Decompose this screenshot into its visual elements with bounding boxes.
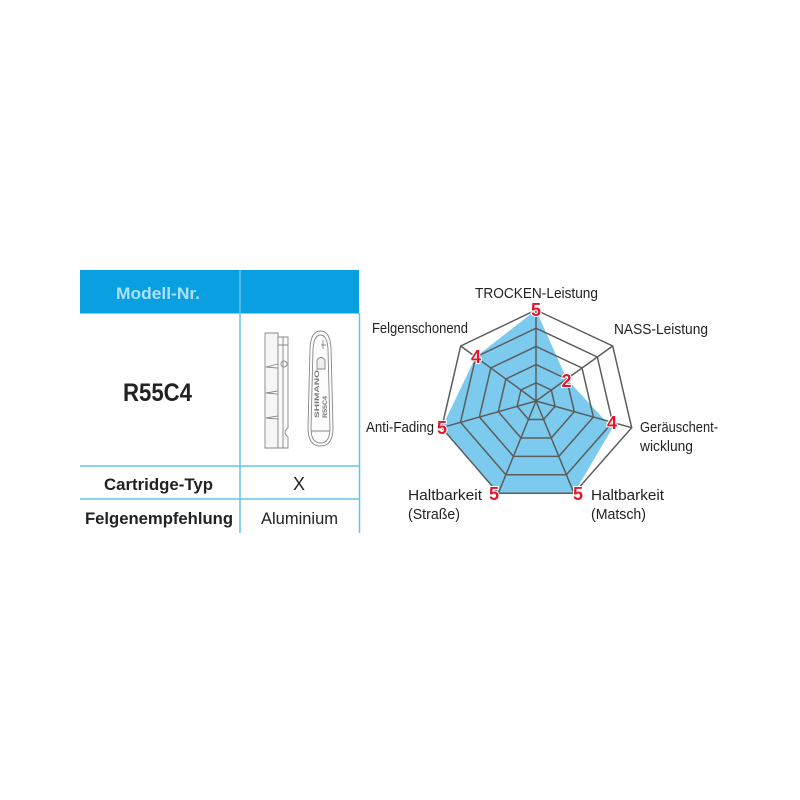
model name: R55C4 (123, 379, 192, 407)
icon text: brand and model (315, 369, 329, 418)
row label: cartridge type: Cartridge-Typ (104, 475, 213, 494)
axis labels: (Matsch) (591, 506, 646, 523)
table header bar (80, 270, 359, 314)
axis labels: Felgenschonend (372, 320, 468, 337)
axis labels (366, 285, 718, 523)
row label: rim recommendation: Felgenempfehlung (85, 509, 233, 528)
radar filled area (442, 310, 612, 493)
panel: model table (80, 270, 360, 533)
axis labels: Haltbarkeit (591, 487, 665, 504)
icon text: brand and model: SHIMANO (315, 369, 321, 418)
axis labels: NASS-Leistung (614, 321, 708, 338)
axis score values (437, 300, 617, 504)
axis score values: 5 (437, 418, 447, 438)
axis score values: 5 (531, 300, 541, 320)
axis score values: 4 (607, 413, 617, 433)
icon: brake pad cartridge (265, 331, 333, 448)
row value: rim recommendation: Aluminium (261, 509, 338, 528)
axis labels: TROCKEN-Leistung (475, 285, 598, 302)
axis labels: wicklung (639, 438, 693, 455)
axis labels: Haltbarkeit (408, 487, 483, 504)
axis labels: Anti-Fading (366, 419, 434, 436)
axis labels: (Straße) (408, 506, 460, 523)
icon text: brand and model: R55C4 (323, 395, 329, 418)
axis labels: Geräuschent- (640, 419, 718, 436)
radar grid (442, 310, 632, 493)
axis score values: 5 (573, 484, 583, 504)
row value: cartridge type: X (293, 474, 305, 494)
axis score values: 4 (471, 347, 481, 367)
radar chart (366, 285, 718, 523)
heading: model number: Modell-Nr. (116, 284, 200, 303)
axis score values: 2 (561, 371, 572, 391)
axis score values: 5 (489, 484, 499, 504)
